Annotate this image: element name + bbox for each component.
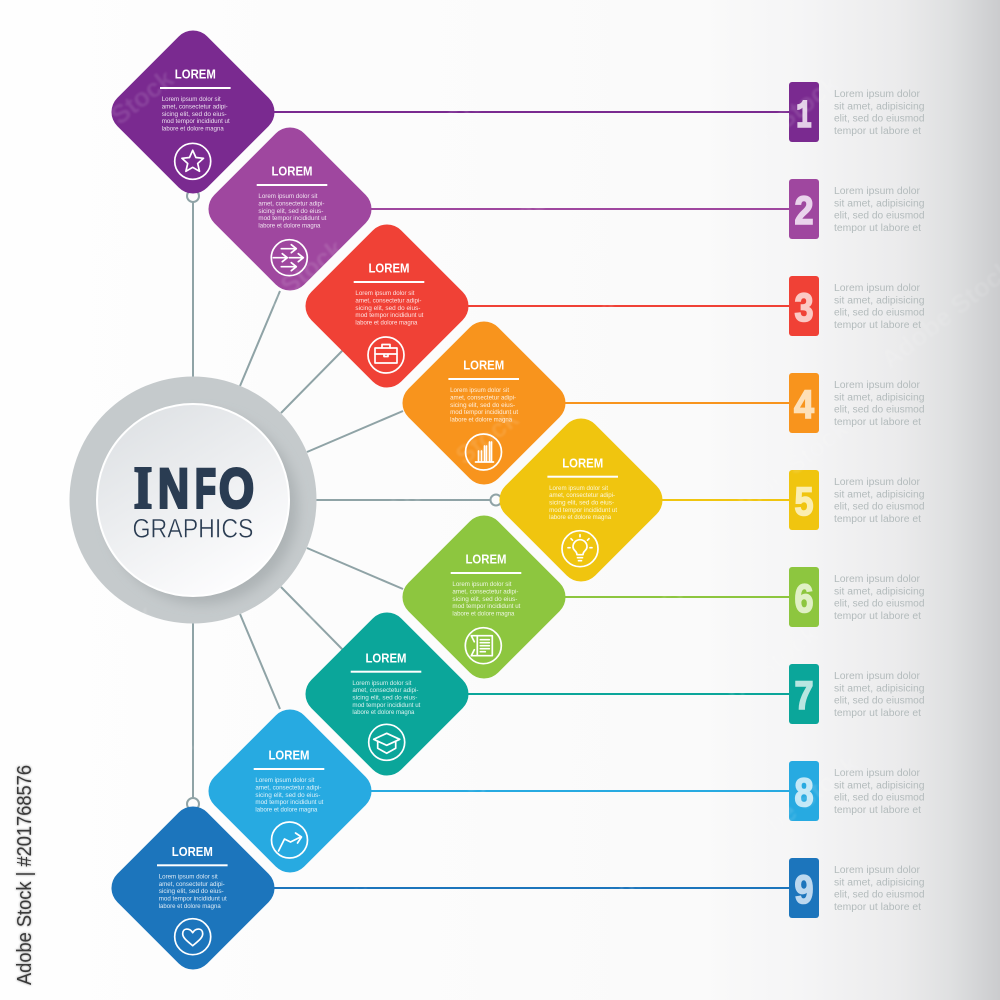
diamond 4 text	[448, 358, 519, 424]
badge 9: 9	[794, 868, 814, 912]
badge 8: 8	[794, 771, 814, 815]
badge 1: 1	[796, 95, 812, 140]
diamond 7 text: Lorem ipsum dolor sit	[352, 680, 412, 687]
side text 6: sit amet, adipisicing	[834, 586, 924, 597]
side text 3: sit amet, adipisicing	[834, 295, 924, 306]
side text 2: sit amet, adipisicing	[834, 198, 924, 209]
diamond 6 text	[451, 552, 521, 618]
diamond 9 text	[157, 844, 228, 910]
icon: graduation cap	[369, 724, 405, 760]
side text 7: Lorem ipsum dolor	[834, 671, 921, 682]
icon: trend arrow	[272, 822, 308, 858]
side text 5: sit amet, adipisicing	[834, 489, 924, 500]
vertical stock credit: Adobe Stock | #201768576	[14, 765, 36, 985]
diamond 4 text: sicing elit, sed do eius-	[450, 402, 515, 409]
badge 6: 6	[794, 577, 814, 621]
side text 2: tempor ut labore et	[834, 223, 921, 234]
badge 6	[789, 567, 819, 627]
hub title: INFO: O	[219, 456, 254, 520]
diamond 9 text: labore et dolore magna	[159, 903, 221, 910]
watermarks: Adobe Stock	[205, 233, 349, 355]
side text 4: Lorem ipsum dolor	[834, 380, 921, 391]
diamond 9 text: LOREM	[172, 844, 213, 859]
icon: document refresh	[465, 628, 501, 664]
watermarks: Adobe Stock	[710, 413, 854, 535]
side text 1: sit amet, adipisicing	[834, 101, 924, 112]
diamond 1 text: Lorem ipsum dolor sit	[162, 96, 221, 103]
diamond 5 text: mod tempor incididunt ut	[549, 507, 617, 514]
diamond 4 text: mod tempor incididunt ut	[450, 409, 518, 416]
diamond 4 text: LOREM	[463, 358, 504, 373]
watermarks: Adobe Stock	[55, 728, 199, 850]
diamond 7 text	[351, 650, 421, 716]
hub title: INFO: F	[195, 456, 216, 520]
diamond 2 text: amet, consectetur adipi-	[258, 200, 324, 208]
diamond 7 text: amet, consectetur adipi-	[352, 687, 418, 694]
diamond 8 text: amet, consectetur adipi-	[255, 784, 321, 792]
side text 9: sit amet, adipisicing	[834, 877, 924, 888]
side text 2	[834, 186, 924, 234]
diamond 1	[103, 22, 283, 202]
side text 4: elit, sed do eiusmod	[834, 405, 924, 416]
diamond 2 text: Lorem ipsum dolor sit	[258, 193, 318, 200]
diamond 7 text: LOREM	[366, 650, 406, 665]
side text 1: tempor ut labore et	[834, 126, 921, 137]
diamond 7 text: labore et dolore magna	[352, 709, 415, 716]
diamond 1 text: labore et dolore magna	[162, 126, 224, 132]
icon: star	[175, 143, 211, 179]
connector lines from hub to diamonds	[187, 190, 502, 810]
icon: heart	[175, 919, 211, 955]
diamond 5 text: sicing elit, sed do eius-	[549, 500, 614, 507]
diamond 6	[394, 507, 574, 687]
watermarks: Adobe Stock	[540, 243, 684, 365]
watermarks: Adobe Stock	[700, 68, 844, 190]
diamond 3 text: Lorem ipsum dolor sit	[355, 290, 415, 297]
watermarks: Adobe Stock	[390, 738, 534, 860]
badge 2	[789, 179, 819, 239]
diamond 9 text: sicing elit, sed do eius-	[159, 888, 224, 895]
watermarks: Adobe Stock	[15, 598, 159, 720]
watermarks: Adobe Stock	[220, 568, 364, 690]
diamond 4 text: amet, consectetur adipi-	[450, 394, 516, 402]
badge 2: 2	[794, 189, 814, 233]
central hub	[70, 376, 316, 624]
diamond 7 text: sicing elit, sed do eius-	[352, 695, 417, 702]
diamond 4	[394, 313, 574, 493]
side text 8: tempor ut labore et	[834, 805, 921, 816]
diamond 1 text	[160, 67, 231, 132]
badge 3	[789, 276, 819, 336]
diamond 8 text: mod tempor incididunt ut	[255, 799, 324, 806]
badge 8	[789, 761, 819, 821]
hub subtitle: GRAPHICS: GRAPHICS	[132, 514, 254, 544]
watermarks: Adobe Stock	[720, 748, 864, 870]
diamond 5 text: labore et dolore magna	[549, 514, 611, 521]
icon: bar chart	[466, 434, 502, 470]
watermarks: Adobe Stock	[380, 403, 524, 525]
watermarks: Adobe Stock	[235, 878, 379, 1000]
badge 1	[789, 82, 819, 142]
diamond 6 text: sicing elit, sed do eius-	[452, 596, 517, 603]
diamond 1 text: LOREM	[175, 67, 216, 82]
coloured connector lines to number badges	[272, 112, 790, 888]
diamond 2	[200, 119, 380, 299]
side text 3: Lorem ipsum dolor	[834, 283, 921, 294]
diamond 8 text: labore et dolore magna	[255, 806, 318, 814]
diamond 3 text: labore et dolore magna	[355, 320, 418, 326]
side text 6: tempor ut labore et	[834, 611, 921, 622]
diamond 8 text: LOREM	[268, 748, 310, 763]
side text 5	[834, 477, 924, 525]
side text 3	[834, 283, 924, 331]
side text 4: tempor ut labore et	[834, 417, 921, 428]
diamond 8 text: sicing elit, sed do eius-	[255, 792, 320, 799]
side text 6	[834, 574, 924, 622]
badge 7: 7	[794, 674, 814, 718]
side text 7: tempor ut labore et	[834, 708, 921, 719]
diamond 9	[103, 798, 283, 978]
diamond 7 text: mod tempor incididunt ut	[352, 702, 421, 709]
diamond 5 text	[547, 455, 618, 521]
side text 8	[834, 768, 924, 816]
diamond 6 text: mod tempor incididunt ut	[452, 603, 521, 610]
watermarks: Adobe Stock	[370, 68, 514, 190]
side text 9: elit, sed do eiusmod	[834, 890, 924, 901]
side text 7	[834, 671, 924, 719]
hub title: INFO: N	[158, 456, 189, 520]
side text 1: Lorem ipsum dolor	[834, 89, 921, 100]
hub title: INFO: I	[134, 454, 152, 520]
vertical stock credit: Adobe Stock | #201768576	[14, 765, 36, 985]
side text 6: elit, sed do eiusmod	[834, 599, 924, 610]
watermarks: Adobe Stock	[0, 268, 144, 390]
diamond 2 text: mod tempor incididunt ut	[258, 215, 327, 222]
watermarks: Adobe Stock	[520, 853, 664, 975]
badge 7	[789, 664, 819, 724]
diamond 3 text: mod tempor incididunt ut	[355, 312, 424, 319]
diamond 5 text: Lorem ipsum dolor sit	[549, 485, 608, 492]
diamond 2 text: LOREM	[272, 164, 312, 179]
diamond 3 text	[354, 261, 424, 326]
diamond 6 text: labore et dolore magna	[452, 610, 515, 618]
side text 6: Lorem ipsum dolor	[834, 574, 921, 585]
diamond 6 text: Lorem ipsum dolor sit	[452, 581, 512, 588]
side text 3: tempor ut labore et	[834, 320, 921, 331]
side text 8: Lorem ipsum dolor	[834, 768, 921, 779]
icon: briefcase	[368, 337, 404, 373]
side text 8: elit, sed do eiusmod	[834, 793, 924, 804]
side text 5: tempor ut labore et	[834, 514, 921, 525]
watermarks: Adobe Stock	[550, 573, 694, 695]
side text 5: Lorem ipsum dolor	[834, 477, 921, 488]
watermarks: Adobe Stock	[35, 63, 179, 185]
side text 3: elit, sed do eiusmod	[834, 308, 924, 319]
diamond 4 text: labore et dolore magna	[450, 416, 512, 424]
diamond 8	[200, 701, 380, 881]
side text 9: Lorem ipsum dolor	[834, 865, 921, 876]
side text 8: sit amet, adipisicing	[834, 780, 924, 791]
badge 9	[789, 858, 819, 918]
diamond 7	[297, 604, 477, 784]
side text 2: Lorem ipsum dolor	[834, 186, 921, 197]
diamond 1 text: amet, consectetur adipi-	[162, 104, 228, 110]
side text 9: tempor ut labore et	[834, 902, 921, 913]
diamond 3 text: LOREM	[368, 261, 410, 276]
diamond 3 text: amet, consectetur adipi-	[355, 298, 421, 304]
diamond 1 text: mod tempor incididunt ut	[162, 118, 230, 125]
badge 4	[789, 373, 819, 433]
side text 7: elit, sed do eiusmod	[834, 696, 924, 707]
diamond 9 text: Lorem ipsum dolor sit	[159, 873, 218, 880]
diamond 3	[297, 216, 477, 396]
side text 4	[834, 380, 924, 428]
diamond 6 text: LOREM	[466, 552, 506, 567]
badge 4: 4	[794, 383, 815, 427]
diamond 6 text: amet, consectetur adipi-	[452, 588, 518, 596]
diamond 9 text: mod tempor incididunt ut	[159, 895, 227, 902]
diamond 4 text: Lorem ipsum dolor sit	[450, 387, 509, 394]
diamond 5	[491, 410, 671, 590]
diamond 5 text: amet, consectetur adipi-	[549, 492, 615, 499]
side text 1: elit, sed do eiusmod	[834, 114, 924, 125]
side text 9	[834, 865, 924, 913]
diamond 5 text: LOREM	[562, 455, 603, 470]
watermarks: Adobe Stock	[495, 118, 639, 240]
diamond 8 text: Lorem ipsum dolor sit	[255, 777, 315, 784]
watermarks: Adobe Stock	[680, 618, 824, 740]
diamond 2 text: labore et dolore magna	[258, 222, 321, 230]
side text 1	[834, 89, 924, 137]
side text 4: sit amet, adipisicing	[834, 392, 924, 403]
diamond 2 text: sicing elit, sed do eius-	[258, 208, 323, 215]
diamond 1 text: sicing elit, sed do eius-	[162, 111, 227, 118]
side text 2: elit, sed do eiusmod	[834, 211, 924, 222]
diamond 3 text: sicing elit, sed do eius-	[355, 305, 420, 312]
side text 5: elit, sed do eiusmod	[834, 502, 924, 513]
diamond 9 text: amet, consectetur adipi-	[159, 881, 225, 888]
diamond 2 text	[257, 164, 327, 230]
badge 5: 5	[794, 480, 814, 524]
badge 5	[789, 470, 819, 530]
icon: arrows	[271, 240, 307, 276]
side text 7: sit amet, adipisicing	[834, 683, 924, 694]
diamond 8 text	[254, 748, 324, 814]
icon: light bulb	[562, 531, 598, 567]
badge 3: 3	[794, 286, 814, 330]
